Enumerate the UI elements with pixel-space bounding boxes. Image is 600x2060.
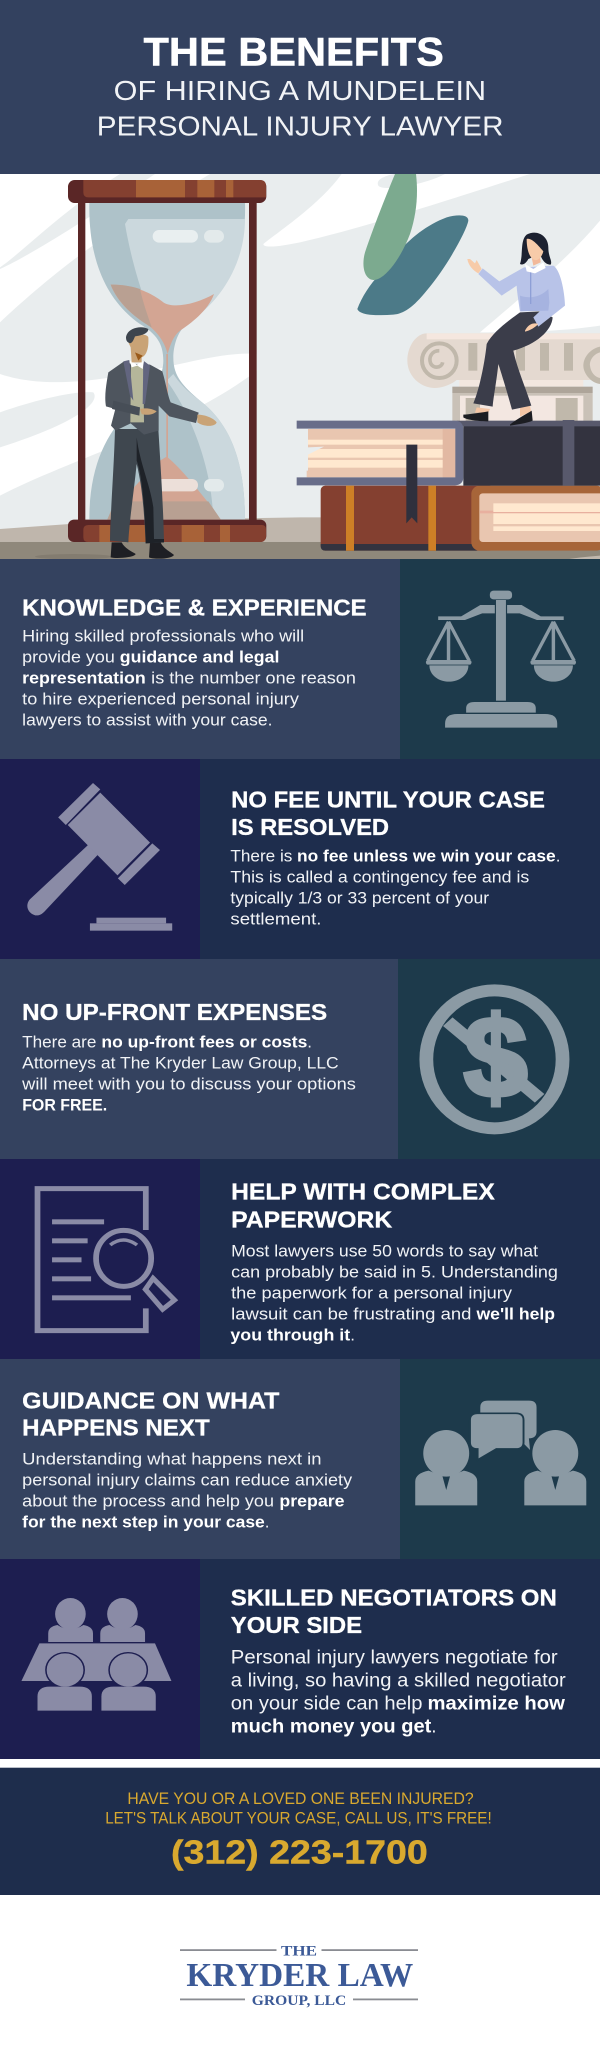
- body text: guidance: [22, 1450, 353, 1532]
- panel: guidance on what happens next: [0, 1359, 600, 1559]
- body text: skilled negotiators: maximize how: [428, 1694, 565, 1715]
- body text: skilled negotiators: much money you get: [231, 1717, 432, 1738]
- body text: skilled negotiators: Personal injury lawyers negotiate for: [231, 1647, 558, 1668]
- panel: complex paperwork: [0, 1159, 600, 1359]
- heading: no fee: NO FEE UNTIL YOUR CASE: [231, 786, 545, 812]
- body text: skilled negotiators: [231, 1647, 566, 1738]
- body text: guidance: prepare: [279, 1492, 344, 1511]
- body text: complex paperwork: the paperwork for a personal injury: [231, 1284, 513, 1303]
- body text: no up-front expenses: There are: [22, 1033, 96, 1052]
- call to action text: [105, 1790, 492, 1827]
- call to action text: LET'S TALK ABOUT YOUR CASE, CALL US, IT'S FREE!: [105, 1809, 492, 1827]
- body text: complex paperwork: you through it: [230, 1326, 351, 1345]
- heading: guidance: HAPPENS NEXT: [22, 1415, 210, 1441]
- title: [97, 30, 504, 142]
- heading: no fee: [231, 786, 545, 840]
- body text: knowledge and experience: to hire experienced personal injury: [22, 690, 299, 709]
- title: THE BENEFITS: [144, 30, 444, 74]
- body text: no fee: There is: [230, 847, 292, 866]
- heading: no fee: IS RESOLVED: [231, 814, 389, 840]
- icon: document with magnifier: [38, 1189, 175, 1331]
- heading: complex paperwork: HELP WITH COMPLEX: [231, 1179, 495, 1205]
- body text: no fee: This is called a contingency fee and is: [230, 868, 529, 887]
- header panel: [0, 0, 600, 174]
- heading: skilled negotiators: [231, 1585, 557, 1638]
- body text: knowledge and experience: guidance and legal: [120, 648, 279, 667]
- body text: skilled negotiators: .: [431, 1717, 437, 1738]
- panel: no up-front expenses: [0, 959, 600, 1159]
- body text: complex paperwork: can probably be said in 5. Understanding: [231, 1263, 558, 1282]
- body text: no up-front expenses: Attorneys at The Kryder Law Group, LLC: [22, 1054, 339, 1073]
- body text: complex paperwork: we'll help: [475, 1305, 555, 1324]
- body text: knowledge and experience: provide you: [22, 648, 115, 667]
- heading: skilled negotiators: YOUR SIDE: [231, 1612, 362, 1638]
- woman seated: [463, 233, 565, 426]
- body text: complex paperwork: Most lawyers use 50 words to say what: [231, 1242, 538, 1261]
- call to action text: HAVE YOU OR A LOVED ONE BEEN INJURED?: [127, 1790, 474, 1808]
- body text: no up-front expenses: FOR FREE.: [22, 1096, 107, 1115]
- panel: skilled negotiators: [0, 1559, 600, 1759]
- body text: no fee: no fee unless we win your case: [297, 847, 556, 866]
- body text: skilled negotiators: on your side can help: [231, 1694, 422, 1715]
- body text: skilled negotiators: a living, so having a skilled negotiator: [231, 1671, 566, 1692]
- phone number: (312) 223-1700: [171, 1833, 428, 1870]
- body text: complex paperwork: lawsuit can be frustrating and: [231, 1305, 471, 1324]
- body text: complex paperwork: .: [350, 1326, 355, 1345]
- panel: no fee until resolved: [0, 759, 600, 959]
- heading: no up-front expenses: NO UP-FRONT EXPENSES: [22, 999, 327, 1025]
- body text: knowledge and experience: lawyers to assist with your case.: [22, 711, 273, 730]
- panel: knowledge and experience: [0, 559, 600, 759]
- title: PERSONAL INJURY LAWYER: [97, 111, 504, 142]
- hourglass: [68, 180, 266, 542]
- title: OF HIRING A MUNDELEIN: [114, 75, 486, 106]
- logo: THE: [281, 1944, 317, 1960]
- heading: guidance: [22, 1387, 279, 1441]
- stacked books: [297, 420, 600, 551]
- body text: no up-front expenses: [21, 1033, 356, 1115]
- logo: GROUP, LLC: [252, 1993, 346, 2009]
- body text: complex paperwork: [230, 1242, 558, 1345]
- body text: knowledge and experience: Hiring skilled professionals who will: [22, 627, 304, 646]
- body text: guidance: .: [265, 1513, 270, 1532]
- icon: gavel: [27, 783, 172, 931]
- heading: knowledge and experience: KNOWLEDGE & EXPERIENCE: [22, 595, 367, 621]
- heading: complex paperwork: [231, 1179, 495, 1233]
- icon: no money: $: [464, 994, 528, 1122]
- man in suit: [105, 327, 217, 559]
- icon: two people talking: [415, 1401, 586, 1505]
- body text: guidance: about the process and help you: [22, 1492, 274, 1511]
- hero illustration: [0, 174, 600, 561]
- icon: meeting table: [21, 1598, 171, 1711]
- body text: no fee: typically 1/3 or 33 percent of your: [230, 889, 489, 908]
- body text: knowledge and experience: representation: [22, 669, 146, 688]
- body text: no fee: .: [556, 847, 560, 866]
- heading: skilled negotiators: SKILLED NEGOTIATORS ON: [231, 1585, 557, 1611]
- body text: knowledge and experience: [22, 627, 356, 730]
- logo: KRYDER LAW: [186, 1957, 413, 1994]
- icon: no money: [426, 990, 563, 1128]
- body text: knowledge and experience: is the number one reason: [151, 669, 356, 688]
- body text: guidance: for the next step in your case: [22, 1513, 265, 1532]
- body text: no up-front expenses: will meet with you to discuss your options: [21, 1075, 356, 1094]
- body text: no up-front expenses: .: [307, 1033, 312, 1052]
- heading: complex paperwork: PAPERWORK: [231, 1207, 393, 1233]
- body text: no fee: [230, 847, 560, 929]
- logo: [180, 1944, 418, 2009]
- body text: no up-front expenses: no up-front fees or costs: [101, 1033, 307, 1052]
- plant leaves: [357, 174, 468, 315]
- heading: guidance: GUIDANCE ON WHAT: [22, 1387, 279, 1413]
- call to action panel: [0, 1767, 600, 1895]
- icon: scales of justice: [426, 591, 576, 728]
- column: [407, 333, 600, 421]
- body text: no fee: settlement.: [230, 910, 322, 929]
- body text: guidance: personal injury claims can reduce anxiety: [22, 1471, 353, 1490]
- body text: guidance: Understanding what happens next in: [22, 1450, 321, 1469]
